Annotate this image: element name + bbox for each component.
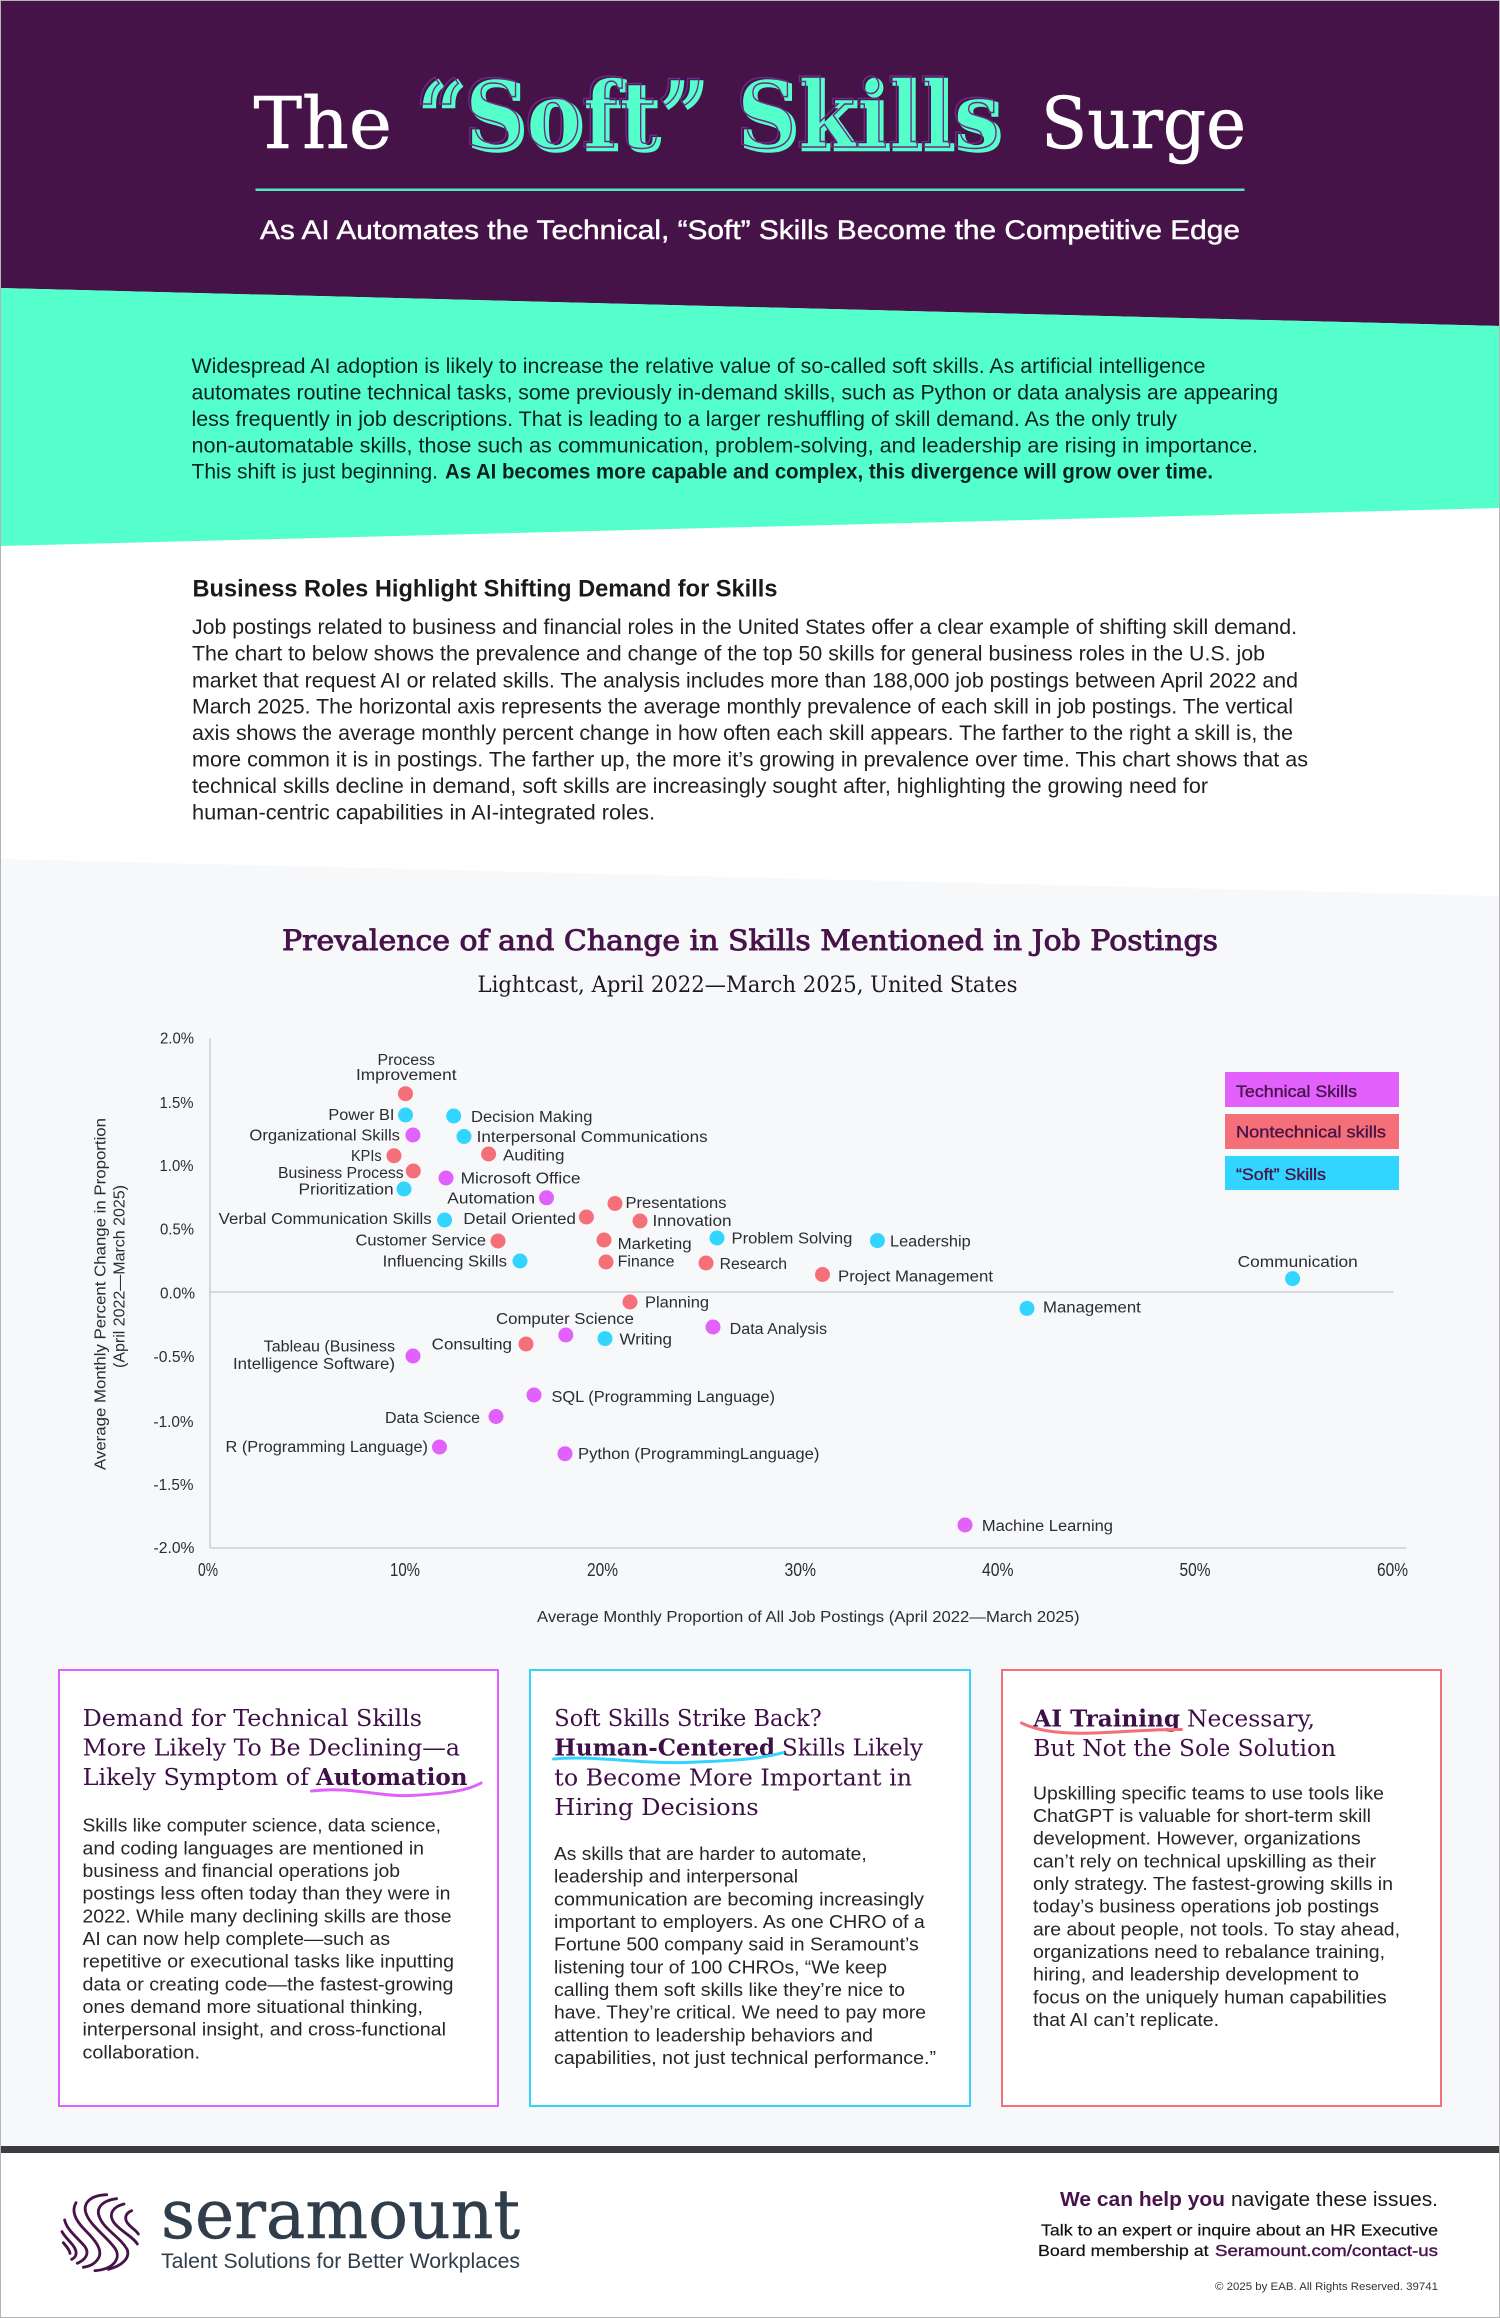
card body text: can’t rely on technical upskilling as their <box>1033 1850 1376 1871</box>
card heading: Human-Centered <box>554 1735 775 1762</box>
subtitle: As AI Automates the Technical, “Soft” Skills Become the Competitive Edge <box>260 215 1240 245</box>
intro text <box>192 355 1278 484</box>
y axis tick labels: 1.5% <box>160 1095 194 1112</box>
card heading: Automation <box>315 1764 468 1791</box>
point: Planning <box>622 1294 709 1312</box>
point: Auditing: Auditing <box>503 1148 564 1165</box>
point: Interpersonal Communications: Interpersonal Communications <box>477 1129 708 1146</box>
copyright: © 2025 by EAB. All Rights Reserved. 39741 <box>1215 2281 1438 2293</box>
y axis tick labels <box>154 1030 195 1557</box>
panel: business roles text <box>192 576 1308 824</box>
card body text: leadership and interpersonal <box>554 1866 798 1887</box>
section heading: Business Roles Highlight Shifting Demand for Skills <box>192 576 778 603</box>
point: Data Science: Data Science <box>385 1410 480 1427</box>
card body text: 2022. While many declining skills are those <box>82 1905 452 1926</box>
intro text: As AI becomes more capable and complex, this divergence will grow over time. <box>445 460 1213 484</box>
call to action: Seramount.com/contact-us <box>1215 2243 1438 2260</box>
title: “Soft” Skills <box>414 60 1000 170</box>
card body text: organizations need to rebalance training, <box>1033 1941 1385 1962</box>
card body text: are about people, not tools. To stay ahead, <box>1033 1918 1400 1939</box>
legend: “Soft” Skills <box>1236 1166 1326 1184</box>
underline squiggle <box>1022 1723 1182 1733</box>
card body text: data or creating code—the fastest-growing <box>82 1973 454 1994</box>
card body text: postings less often today than they were in <box>82 1883 450 1904</box>
legend <box>1225 1072 1399 1190</box>
point: Writing: Writing <box>620 1332 672 1349</box>
point: KPIs: KPIs <box>351 1148 382 1165</box>
point: Finance: Finance <box>618 1254 675 1271</box>
card heading: Hiring Decisions <box>554 1795 759 1821</box>
x axis tick labels: 50% <box>1180 1559 1210 1580</box>
call to action: Talk to an expert or inquire about an HR Executive <box>1041 2223 1438 2240</box>
card body text: Upskilling specific teams to use tools like <box>1033 1782 1384 1803</box>
wordmark: seramount <box>161 2176 520 2255</box>
card body text: listening tour of 100 CHROs, “We keep <box>554 1956 887 1977</box>
section body text: Job postings related to business and financial roles in the United States offer a clear example of shifting skill demand. <box>192 615 1297 639</box>
card heading: to Become More Important in <box>554 1765 912 1791</box>
card body text: Skills like computer science, data science, <box>82 1815 441 1836</box>
point: Marketing: Marketing <box>618 1236 692 1253</box>
point: Process Improvement: Process <box>378 1052 435 1069</box>
point: Consulting: Consulting <box>432 1337 512 1354</box>
card body text: development. However, organizations <box>1033 1828 1361 1849</box>
x axis tick labels: 60% <box>1377 1559 1408 1580</box>
icon: wavy sphere mark <box>62 2195 138 2271</box>
panel: chart section background <box>0 859 1500 2146</box>
point: Business Process: Business Process <box>278 1165 404 1182</box>
point: KPIs <box>351 1148 402 1165</box>
card body text: capabilities, not just technical performance.” <box>554 2047 936 2068</box>
legend: Technical Skills <box>1236 1083 1357 1101</box>
y axis tick labels: -1.5% <box>154 1477 194 1494</box>
intro text: automates routine technical tasks, some previously in-demand skills, such as Python or data analysis are appearing <box>192 382 1278 404</box>
card body text: today’s business operations job postings <box>1033 1896 1379 1917</box>
x axis tick labels: 10% <box>390 1559 420 1580</box>
y axis tick labels: 1.0% <box>160 1158 194 1175</box>
panel: AI training card <box>1002 1670 1441 2106</box>
title: Surge <box>1041 82 1246 165</box>
footer divider bar <box>0 2146 1500 2153</box>
call to action <box>1038 2189 1438 2260</box>
card body text: calling them soft skills like they’re nice to <box>554 1979 905 2000</box>
panel: intro band <box>0 288 1500 546</box>
point: Influencing Skills: Influencing Skills <box>383 1254 507 1271</box>
x axis tick labels: 20% <box>587 1559 618 1580</box>
panel: footer <box>62 2176 1438 2293</box>
panel: soft skills card <box>530 1670 970 2106</box>
point: Computer Science <box>496 1311 634 1342</box>
point: Research: Research <box>720 1256 787 1273</box>
card heading <box>554 1706 923 1821</box>
point: Planning: Planning <box>645 1295 709 1312</box>
section body text <box>192 615 1308 824</box>
point: Tableau: Tableau (Business <box>264 1339 395 1356</box>
point: Customer Service: Customer Service <box>356 1232 486 1250</box>
y axis title: Average Monthly Percent Change in Proportion <box>93 1118 110 1470</box>
legend: Nontechnical skills <box>1236 1123 1386 1141</box>
logo: seramount <box>62 2176 520 2273</box>
card heading: Soft Skills Strike Back? <box>554 1706 822 1732</box>
x axis tick labels <box>198 1559 1408 1580</box>
card body text: communication are becoming increasingly <box>554 1888 925 1909</box>
title: The <box>254 82 392 165</box>
card body text: focus on the uniquely human capabilities <box>1033 1986 1387 2007</box>
panel: technical skills card <box>59 1670 498 2106</box>
point: Communication <box>1238 1254 1358 1286</box>
card heading: Demand for Technical Skills <box>83 1706 422 1732</box>
card body text <box>1033 1782 1400 2030</box>
card body text: Fortune 500 company said in Seramount’s <box>554 1934 919 1955</box>
card body text <box>82 1815 454 2062</box>
point: Power BI: Power BI <box>328 1107 394 1124</box>
point: Presentations: Presentations <box>626 1195 727 1212</box>
card heading: More Likely To Be Declining—a <box>83 1736 460 1762</box>
card heading: AI Training <box>1032 1706 1180 1733</box>
point: Verbal Communication Skills: Verbal Communication Skills <box>219 1211 432 1228</box>
card heading <box>83 1706 468 1791</box>
y axis tick labels: -1.0% <box>154 1414 194 1431</box>
card body text: have. They’re critical. We need to pay more <box>554 2002 926 2023</box>
call to action: navigate these issues. <box>1231 2189 1438 2211</box>
point: Management: Management <box>1043 1299 1142 1316</box>
y axis tick labels: 0.5% <box>160 1222 194 1238</box>
point: Project Management: Project Management <box>838 1268 994 1285</box>
underline squiggle <box>312 1783 481 1796</box>
card body text: repetitive or executional tasks like inputting <box>82 1951 454 1972</box>
point: Prioritization: Prioritization <box>298 1182 394 1198</box>
point: Marketing <box>596 1232 692 1253</box>
point: Communication: Communication <box>1238 1254 1358 1271</box>
title <box>254 60 1246 173</box>
data points and labels <box>219 1052 1358 1535</box>
point: R: R (Programming Language) <box>226 1439 428 1456</box>
section body text: market that request AI or related skills. The analysis includes more than 188,000 job postings between April 2022 and <box>192 668 1298 692</box>
card body text: attention to leadership behaviors and <box>554 2024 873 2045</box>
card heading: Skills Likely <box>782 1736 923 1762</box>
title: “Soft” Skills <box>418 63 1003 173</box>
underline squiggle <box>554 1753 783 1763</box>
point: Tableau: Intelligence Software) <box>233 1356 395 1373</box>
point: Auditing <box>481 1146 564 1165</box>
point: Detail Oriented: Detail Oriented <box>463 1211 576 1228</box>
section body text: technical skills decline in demand, soft skills are increasingly sought after, highlighting the growing need for <box>192 774 1208 798</box>
point: Data Analysis: Data Analysis <box>730 1321 827 1338</box>
card heading: Necessary, <box>1187 1707 1315 1733</box>
y axis title <box>93 1118 128 1470</box>
section body text: March 2025. The horizontal axis represents the average monthly prevalence of each skill in job postings. The vertical <box>192 695 1293 719</box>
point: SQL: SQL (Programming Language) <box>552 1389 775 1406</box>
x axis tick labels: 0% <box>198 1559 218 1580</box>
card heading: But Not the Sole Solution <box>1033 1736 1336 1762</box>
x axis title: Average Monthly Proportion of All Job Postings (April 2022—March 2025) <box>537 1609 1080 1626</box>
scatter chart <box>93 1030 1408 1626</box>
point: Python: Python (ProgrammingLanguage) <box>578 1446 819 1463</box>
card body text: important to employers. As one CHRO of a <box>554 1911 925 1932</box>
card body text: that AI can’t replicate. <box>1033 2009 1219 2030</box>
intro text: less frequently in job descriptions. That is leading to a larger reshuffling of skill demand. As the only truly <box>192 408 1178 431</box>
card heading: Likely Symptom of <box>83 1765 311 1791</box>
point: Computer Science: Computer Science <box>496 1311 634 1328</box>
point: Tableau <box>233 1339 420 1373</box>
point: Microsoft Office: Microsoft Office <box>461 1170 580 1188</box>
point: Leadership: Leadership <box>890 1234 971 1251</box>
chart title: Prevalence of and Change in Skills Mentioned in Job Postings <box>282 924 1218 957</box>
card body text: AI can now help complete—such as <box>82 1928 390 1949</box>
x axis tick labels: 30% <box>784 1559 816 1580</box>
chart axes <box>210 1039 1406 1548</box>
card body text <box>554 1843 936 2068</box>
intro text: Widespread AI adoption is likely to increase the relative value of so-called soft skills. As artificial intelligence <box>192 355 1206 378</box>
point: Writing <box>598 1331 672 1349</box>
chart subtitle: Lightcast, April 2022—March 2025, United States <box>478 973 1018 998</box>
card body text: hiring, and leadership development to <box>1033 1964 1359 1985</box>
x axis tick labels: 40% <box>982 1559 1014 1580</box>
section body text: axis shows the average monthly percent change in how often each skill appears. The farther to the right a skill is, the <box>192 721 1293 745</box>
section body text: more common it is in postings. The farther up, the more it’s growing in prevalence over time. This chart shows that as <box>192 748 1308 772</box>
card body text: and coding languages are mentioned in <box>82 1837 424 1858</box>
intro text: non-automatable skills, those such as communication, problem-solving, and leadership are rising in importance. <box>192 434 1258 458</box>
section body text: human-centric capabilities in AI-integrated roles. <box>192 800 655 824</box>
y axis tick labels: 2.0% <box>160 1030 194 1048</box>
point: Automation: Automation <box>447 1190 535 1208</box>
point: Organizational Skills: Organizational Skills <box>249 1128 400 1145</box>
card body text: ones demand more situational thinking, <box>82 1996 423 2017</box>
card heading <box>1032 1706 1336 1762</box>
point: Process Improvement: Improvement <box>356 1067 457 1084</box>
point: Machine Learning: Machine Learning <box>982 1518 1113 1535</box>
tagline: Talent Solutions for Better Workplaces <box>161 2250 520 2273</box>
point: Problem Solving: Problem Solving <box>732 1230 852 1248</box>
card body text: only strategy. The fastest-growing skills in <box>1033 1873 1393 1894</box>
card body text: As skills that are harder to automate, <box>554 1843 867 1864</box>
y axis title: (April 2022—March 2025) <box>112 1185 128 1368</box>
card body text: ChatGPT is valuable for short-term skill <box>1033 1805 1371 1826</box>
card body text: business and financial operations job <box>82 1860 400 1881</box>
card body text: collaboration. <box>82 2041 200 2062</box>
point: Decision Making: Decision Making <box>471 1109 592 1126</box>
card body text: interpersonal insight, and cross-functional <box>82 2019 446 2040</box>
call to action: We can help you <box>1060 2189 1225 2211</box>
call to action: Board membership at <box>1038 2243 1209 2260</box>
point: Innovation: Innovation <box>652 1213 732 1230</box>
intro text: This shift is just beginning. <box>192 460 438 484</box>
y axis tick labels: 0.0% <box>160 1286 195 1302</box>
y axis tick labels: -0.5% <box>154 1349 194 1366</box>
y axis tick labels: -2.0% <box>154 1540 194 1557</box>
panel: header banner <box>0 0 1500 326</box>
point: Process Improvement <box>356 1052 457 1101</box>
section body text: The chart to below shows the prevalence and change of the top 50 skills for general business roles in the U.S. job <box>192 642 1265 666</box>
